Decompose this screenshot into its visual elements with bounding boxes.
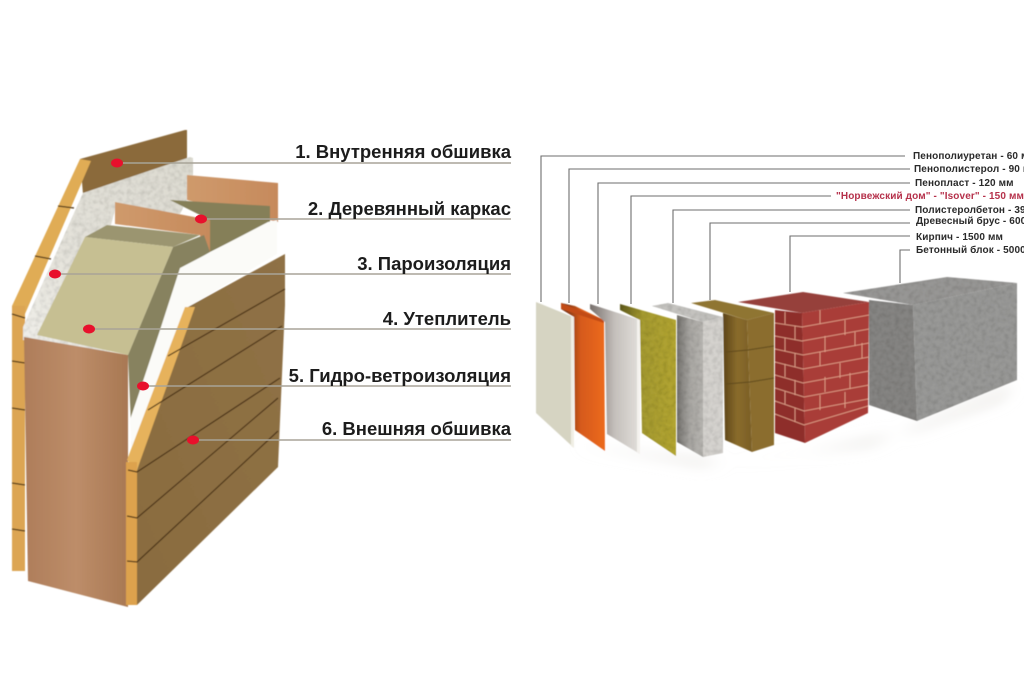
- concrete block: [843, 277, 1017, 421]
- vapour barrier foam: [23, 157, 193, 352]
- material: brick: Кирпич - 1500 мм: [916, 232, 1003, 243]
- slab: timber: [691, 300, 774, 452]
- brick block: [738, 292, 869, 443]
- back frame: [170, 175, 278, 252]
- wall leader lines: [55, 163, 511, 440]
- diagram: wall layers: [12, 130, 285, 607]
- label 1: 1. Внутренняя обшивка: [295, 141, 512, 162]
- label 6: 6. Внешняя обшивка: [322, 418, 512, 439]
- label 5: 5. Гидро-ветроизоляция: [289, 365, 511, 386]
- slab: mineral wool: [620, 304, 676, 456]
- wood frame front: [115, 202, 210, 254]
- material leader lines: [541, 156, 910, 304]
- floor shadow: [575, 385, 1017, 465]
- marker dots: [49, 158, 207, 444]
- outer cladding: [126, 254, 285, 605]
- insulation: [37, 225, 210, 447]
- slab: polyurethane: [536, 302, 574, 448]
- label 2: 2. Деревянный каркас: [308, 198, 511, 219]
- slab: orange foam: [561, 303, 605, 451]
- material: highlighted: "Норвежский дом" - "Isover" - 150 мм: [836, 191, 1024, 202]
- material: foam plastic: Пенопласт - 120 мм: [915, 178, 1014, 189]
- wind barrier: [130, 220, 277, 447]
- material labels: [836, 151, 1024, 256]
- inner cladding board: [12, 130, 187, 571]
- label 3: 3. Пароизоляция: [357, 253, 511, 274]
- slab: white foam: [590, 304, 640, 454]
- label 4: 4. Утеплитель: [383, 308, 511, 329]
- wall layer labels: [289, 141, 512, 439]
- material samples: [536, 277, 1017, 465]
- front wood panel: [24, 337, 128, 607]
- slab: polystyrene concrete: [652, 303, 723, 457]
